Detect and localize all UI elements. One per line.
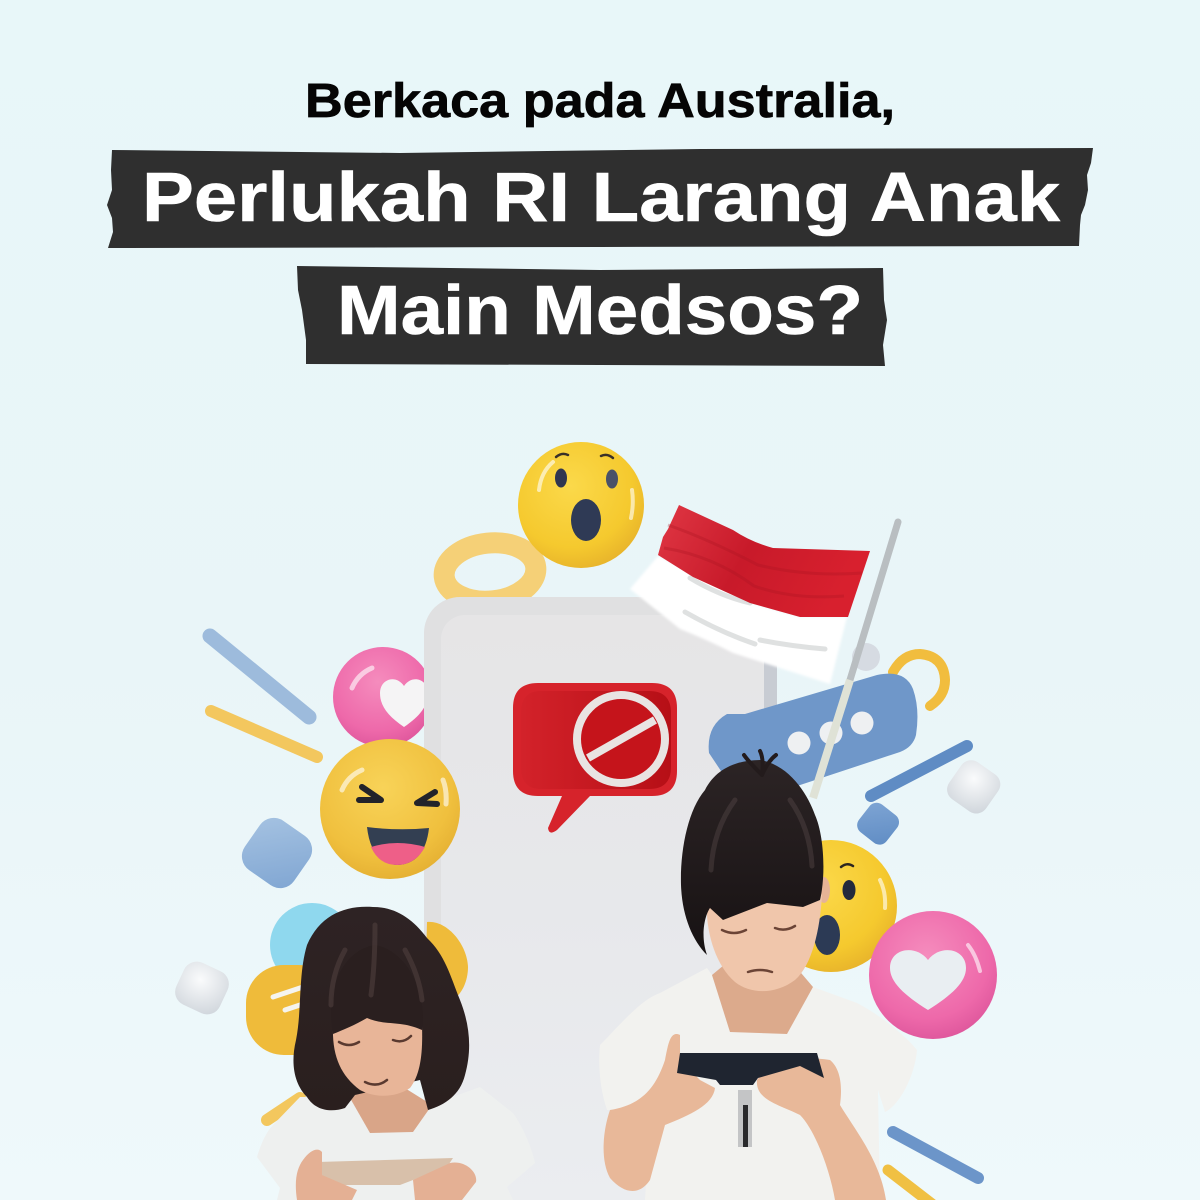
icon: blue cube right	[854, 799, 903, 848]
icon: white blob behind flag	[852, 643, 880, 671]
emoji: surprised top	[518, 442, 644, 568]
flag: Indonesia	[630, 505, 870, 684]
face	[333, 1014, 422, 1096]
girl: tall right	[599, 751, 917, 1200]
girl: small left	[257, 907, 535, 1200]
icon: blue cube left	[235, 811, 319, 895]
phone body	[424, 597, 777, 1200]
hair back	[293, 907, 469, 1110]
bars: lower right	[888, 1132, 978, 1200]
arms and hands	[604, 1034, 886, 1200]
face details	[339, 1036, 411, 1085]
icon: pink heart left	[333, 647, 433, 747]
bars: left blue and yellow	[210, 636, 317, 757]
fringe	[331, 945, 423, 1034]
hair tuft	[744, 751, 776, 775]
title tape 2	[297, 266, 887, 366]
zipper	[738, 1090, 752, 1147]
ring: yellow right	[893, 654, 945, 706]
hair highlight	[711, 800, 812, 870]
neck	[350, 1085, 432, 1133]
icon: pink heart right	[869, 911, 997, 1039]
hair highlight	[331, 925, 422, 1005]
face details	[722, 926, 795, 972]
title line 1: Berkaca pada Australia,	[305, 75, 895, 128]
icon: yellow chat bubble left	[246, 965, 336, 1055]
title tape 1: Perlukah RI Larang Anak	[142, 158, 1060, 236]
phone tall	[677, 1053, 824, 1085]
emoji: laughing	[320, 739, 460, 879]
ear	[818, 877, 830, 903]
icon: cyan bubble	[270, 903, 354, 987]
phone small	[317, 1158, 453, 1185]
dress	[257, 1087, 535, 1200]
hands small	[296, 1150, 476, 1200]
emoji: surprised right	[765, 840, 897, 972]
face	[707, 860, 822, 991]
title tape 1	[107, 148, 1093, 248]
icon: yellow bubble right of small girl	[425, 922, 468, 998]
dress	[599, 968, 917, 1200]
icon: white cube right	[942, 756, 1005, 818]
icon: red prohibited chat bubble	[513, 683, 677, 833]
title	[107, 75, 1093, 366]
hair	[681, 760, 823, 955]
title tape 2: Main Medsos?	[337, 271, 863, 349]
flag pole	[813, 522, 898, 798]
bars: right blue	[871, 746, 967, 796]
illustration	[171, 442, 1005, 1200]
icon: blue chat pill	[709, 674, 917, 794]
icon: white cube left	[171, 957, 233, 1019]
icon: yellow bar lower left	[267, 1098, 300, 1120]
neck	[712, 960, 813, 1034]
ring: yellow top	[441, 538, 539, 606]
